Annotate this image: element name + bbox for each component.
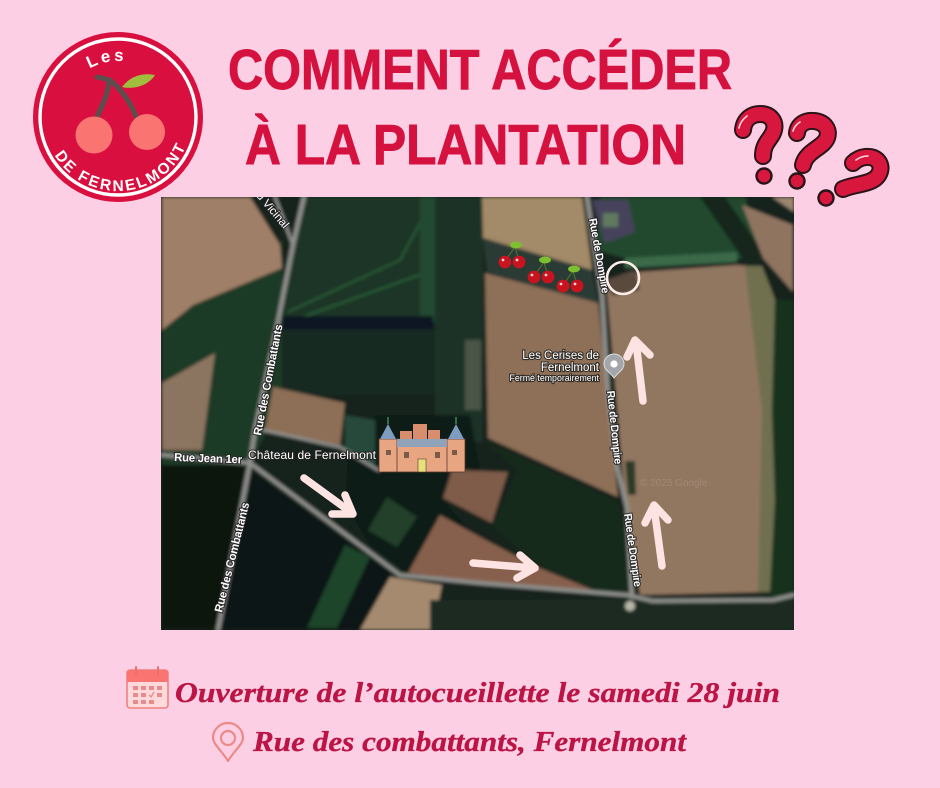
icon: three question marks: [739, 114, 881, 206]
icon: location pin: [213, 723, 243, 761]
map labels: Rue Jean 1er: [174, 452, 243, 466]
logo: Les Cerises de Fernelmont badge: DE FERNELMONT: [55, 142, 184, 192]
highlighted plantation circle: [607, 262, 639, 294]
title: COMMENT ACCÉDER: [228, 38, 732, 101]
arrow 3: up rue de Dompire: [645, 505, 668, 566]
arrow 1: towards the castle road: [304, 478, 353, 514]
map pin: [604, 354, 624, 378]
title: [228, 38, 732, 176]
arrow 2: along the road: [473, 555, 535, 578]
cherry markers on plantation: [499, 242, 583, 292]
map labels: Fermé temporairement: [510, 373, 600, 383]
logo: Les Cerises de Fernelmont badge: Les: [86, 52, 123, 68]
map labels: Les Cerises de: [522, 350, 599, 362]
map labels: Fernelmont: [541, 362, 600, 374]
address text: Rue des combattants, Fernelmont: [252, 726, 687, 758]
map labels: Rue de Dompire: [621, 513, 643, 588]
icon: calendar: [127, 667, 168, 708]
map labels: Rue de Dompire: [586, 217, 611, 294]
map labels: Château de Fernelmont: [248, 448, 377, 462]
watermark: © 2025 Google: [640, 478, 708, 489]
opening date text: Ouverture de l’autocueillette le samedi 28 juin: [175, 677, 780, 709]
map terrain: [161, 197, 794, 630]
castle icon: [379, 417, 465, 472]
map labels: u Vicinal: [254, 190, 291, 231]
logo: Les Cerises de Fernelmont badge: [33, 32, 203, 202]
map labels: [174, 190, 643, 614]
map labels: Rue de Dompire: [604, 390, 624, 465]
title: À LA PLANTATION: [245, 113, 686, 176]
map labels: Rue des Combattants: [252, 323, 286, 437]
panel: satellite map: [161, 190, 794, 630]
arrow 4: towards the plantation: [627, 340, 650, 401]
map labels: Rue des Combattants: [213, 501, 252, 614]
